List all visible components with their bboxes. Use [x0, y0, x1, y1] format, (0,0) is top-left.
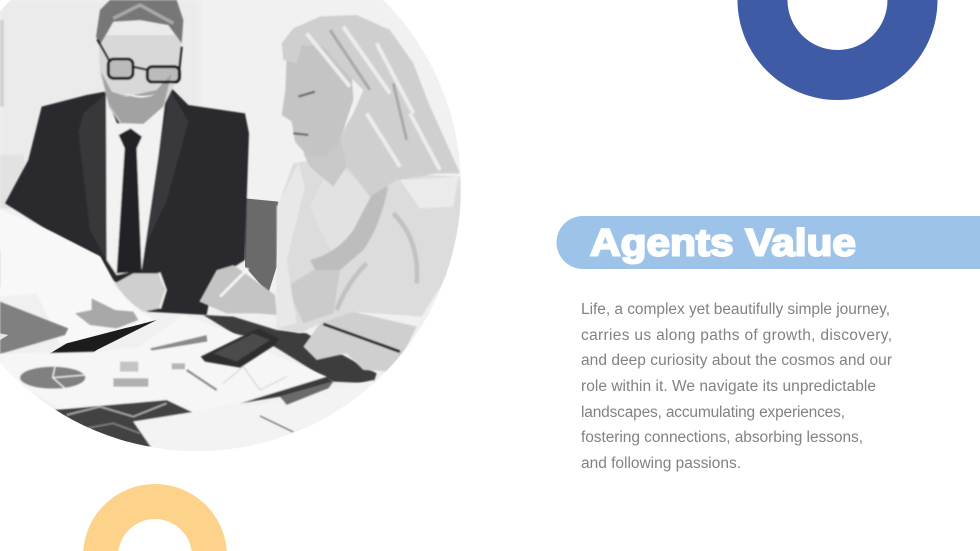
heading: Agents Value — [590, 222, 856, 264]
black wedge under paper — [47, 320, 157, 355]
banner pill — [556, 216, 980, 269]
phone — [201, 328, 279, 368]
woman's hand with pen — [199, 265, 277, 315]
face — [282, 37, 353, 156]
body paragraph: and deep curiosity about the cosmos and our — [581, 352, 892, 369]
held paper — [0, 226, 134, 306]
photo: business meeting in circular crop — [0, 0, 473, 460]
hair — [96, 0, 183, 45]
body paragraph: landscapes, accumulating experiences, — [581, 404, 845, 421]
chair — [245, 198, 278, 293]
laptop — [0, 302, 68, 354]
shirt — [106, 95, 166, 275]
woman — [199, 15, 462, 372]
hand right — [303, 312, 417, 372]
body paragraph: and following passions. — [581, 455, 741, 472]
clothing — [277, 157, 462, 333]
body paragraph: role within it. We navigate its unpredictable — [581, 378, 876, 395]
glasses — [97, 39, 182, 70]
neck — [303, 139, 346, 186]
neck — [108, 104, 130, 124]
title banner — [556, 216, 980, 269]
left hand — [0, 250, 1, 286]
dark table area — [203, 315, 377, 383]
body paragraph — [581, 301, 892, 472]
face — [99, 35, 182, 123]
body paragraph: carries us along paths of growth, discovery, — [581, 327, 892, 344]
decorative blue donut — [738, 0, 938, 100]
table surface — [0, 293, 433, 460]
wall background — [0, 0, 461, 314]
hair — [282, 15, 460, 197]
documents — [0, 330, 375, 447]
man: suit — [0, 0, 249, 315]
tie — [117, 128, 142, 273]
hand and cuff — [115, 273, 165, 312]
beard — [101, 72, 172, 124]
body paragraph: Life, a complex yet beautifully simple journey, — [581, 301, 890, 318]
body paragraph: fostering connections, absorbing lessons, — [581, 429, 863, 446]
decorative yellow donut — [83, 484, 227, 551]
